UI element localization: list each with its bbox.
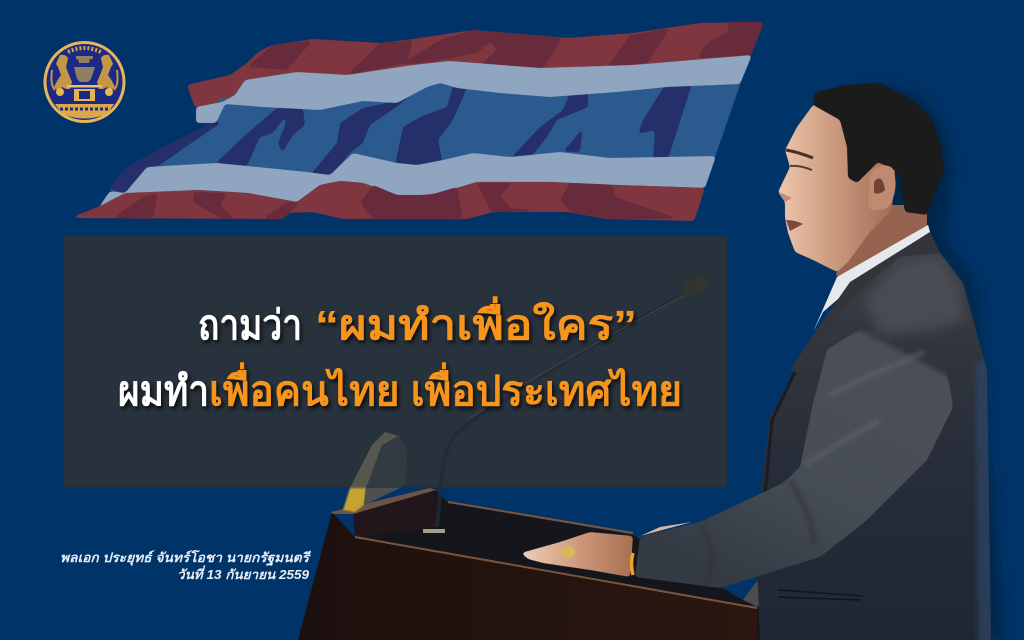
icon: government seal bbox=[44, 41, 126, 123]
podium: right corner bbox=[743, 582, 770, 607]
panel: dark text box bbox=[64, 236, 727, 487]
flag: bottom red band bbox=[70, 181, 705, 221]
podium: brown rim bbox=[355, 502, 757, 608]
man: sleeve fold shadow bbox=[700, 480, 815, 585]
podium: left ledge bbox=[331, 488, 436, 514]
man: facial features bbox=[779, 150, 813, 231]
podium: front body bbox=[298, 512, 757, 640]
man: sleeve creases bbox=[805, 352, 925, 465]
man: shirt collar bbox=[813, 225, 931, 332]
flag: blue band shadows bbox=[108, 84, 692, 194]
Thai flag illustration bbox=[70, 22, 764, 221]
podium: top surface bbox=[353, 488, 757, 607]
headline line 2 orange: เพื่อคนไทย เพื่อประเทศไทย bbox=[209, 362, 682, 414]
man: pocket bbox=[778, 590, 863, 600]
headline line 1 white: ถามว่า bbox=[198, 302, 302, 348]
podium bbox=[298, 488, 790, 640]
acrylic holder bbox=[343, 432, 407, 512]
flag: bottom red shading bbox=[113, 183, 680, 219]
man: face bbox=[778, 105, 895, 272]
podium: plum acrylic tint bbox=[353, 488, 437, 537]
man: jacket right edge glow bbox=[974, 358, 991, 640]
headline bbox=[118, 296, 682, 414]
man: cuff edge bbox=[636, 522, 692, 538]
man: jacket torso bbox=[758, 232, 991, 640]
shadow behind man bbox=[830, 86, 1004, 640]
podium: base dark bbox=[757, 590, 790, 640]
man: front edge bbox=[765, 372, 795, 495]
man: neck bbox=[836, 205, 927, 290]
attribution bbox=[60, 549, 311, 582]
headline line 2 white: ผมทำ bbox=[118, 368, 209, 414]
man: jacket shoulder highlight bbox=[865, 258, 965, 335]
flag: top white band bbox=[196, 55, 752, 123]
man in suit bbox=[521, 83, 1000, 640]
man: orange wristband bbox=[632, 553, 633, 575]
flag: red band shading bbox=[247, 22, 764, 75]
flag: top red band bbox=[187, 22, 764, 108]
man: ear bbox=[868, 165, 896, 211]
man: sleeve bbox=[635, 320, 953, 588]
flag: blue band bbox=[108, 78, 742, 195]
man: hair bbox=[813, 83, 944, 215]
man: ring bbox=[561, 546, 575, 558]
man: lapel bbox=[790, 232, 940, 372]
man: hand bbox=[521, 532, 633, 577]
flag: lower white band bbox=[99, 152, 716, 209]
microphone bbox=[423, 272, 712, 533]
attribution line 1: พลเอก ประยุทธ์ จันทร์โอชา นายกรัฐมนตรี bbox=[60, 549, 311, 567]
headline line 1 orange: “ผมทำเพื่อใคร” bbox=[315, 296, 637, 348]
attribution line 2: วันที่ 13 กันยายน 2559 bbox=[177, 565, 310, 582]
